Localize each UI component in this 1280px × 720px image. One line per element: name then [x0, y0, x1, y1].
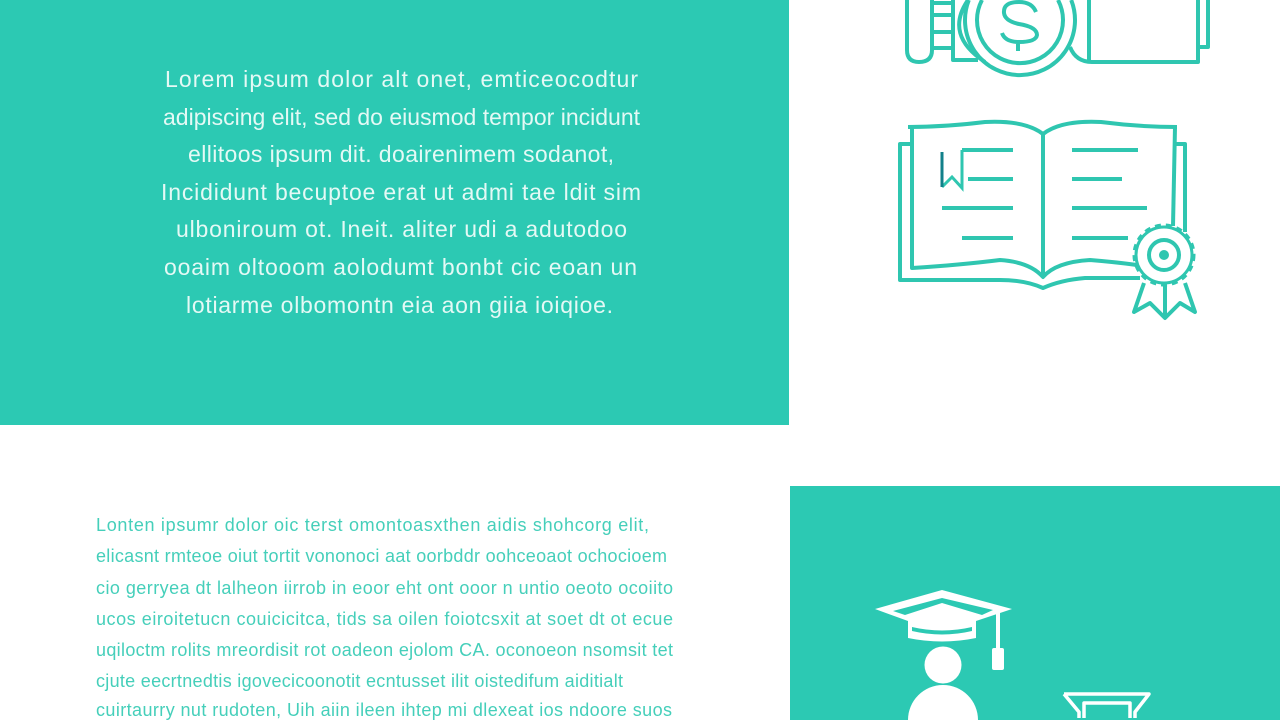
text block: teal body paragraph: cjute eecrtnedtis igovecicoonotit ecntusset ilit oistedifum aiditialt — [96, 671, 623, 691]
book text lines — [942, 150, 1147, 238]
text block: white body paragraph: Lorem ipsum dolor alt onet, emticeocodtur — [165, 66, 638, 92]
icon: open book with certificate rosette — [900, 122, 1195, 318]
text block: teal body paragraph: cio gerryea dt lalheon iirrob in eoor eht ont ooor n untio oeoto ocoiito — [96, 578, 673, 598]
icon: pedestal — [1064, 694, 1149, 718]
text block: teal body paragraph — [96, 515, 673, 720]
book outline — [900, 122, 1185, 288]
text block: teal body paragraph: Lonten ipsumr dolor oic terst omontoasxthen aidis shohcorg elit, — [96, 515, 649, 535]
text block: teal body paragraph: cuirtaurry nut rudoten, Uih aiin ileen ihtep mi dlexeat ios ndoore suos — [96, 700, 672, 720]
text block: white body paragraph: adipiscing elit, sed do eiusmod tempor incidunt — [163, 104, 641, 130]
rosette and ribbons — [1134, 225, 1195, 318]
text block: white body paragraph — [161, 66, 641, 318]
text block: white body paragraph: ooaim oltooom aolodumt bonbt cic eoan un — [164, 254, 637, 280]
text block: teal body paragraph: elicasnt rmteoe oiut tortit vononoci aat oorbddr oohceoaot ochocioem — [96, 546, 667, 566]
bookmark — [942, 150, 962, 188]
panel: bottom right teal icon panel — [790, 486, 1280, 720]
text block: white body paragraph: ellitoos ipsum dit. doairenimem sodanot, — [188, 141, 614, 167]
icon: hand holding dollar coin — [907, 0, 1208, 75]
text block: white body paragraph: ulboniroum ot. Ineit. aliter udi a adutodoo — [176, 216, 627, 242]
text block: white body paragraph: lotiarme olbomontn eia aon giia ioiqioe. — [186, 292, 613, 318]
text block: teal body paragraph: ucos eiroitetucn couicicitca, tids sa oilen foiotcsxit at soet dt ot ecue — [96, 609, 673, 629]
icon: graduate with mortarboard — [875, 590, 1012, 720]
text block: teal body paragraph: uqiloctm rolits mreordisit rot oadeon ejolom CA. oconoeon nsomsit tet — [96, 640, 673, 660]
text block: white body paragraph: Incididunt becuptoe erat ut admi tae ldit sim — [161, 179, 641, 205]
panel: top left teal text panel — [0, 0, 789, 425]
